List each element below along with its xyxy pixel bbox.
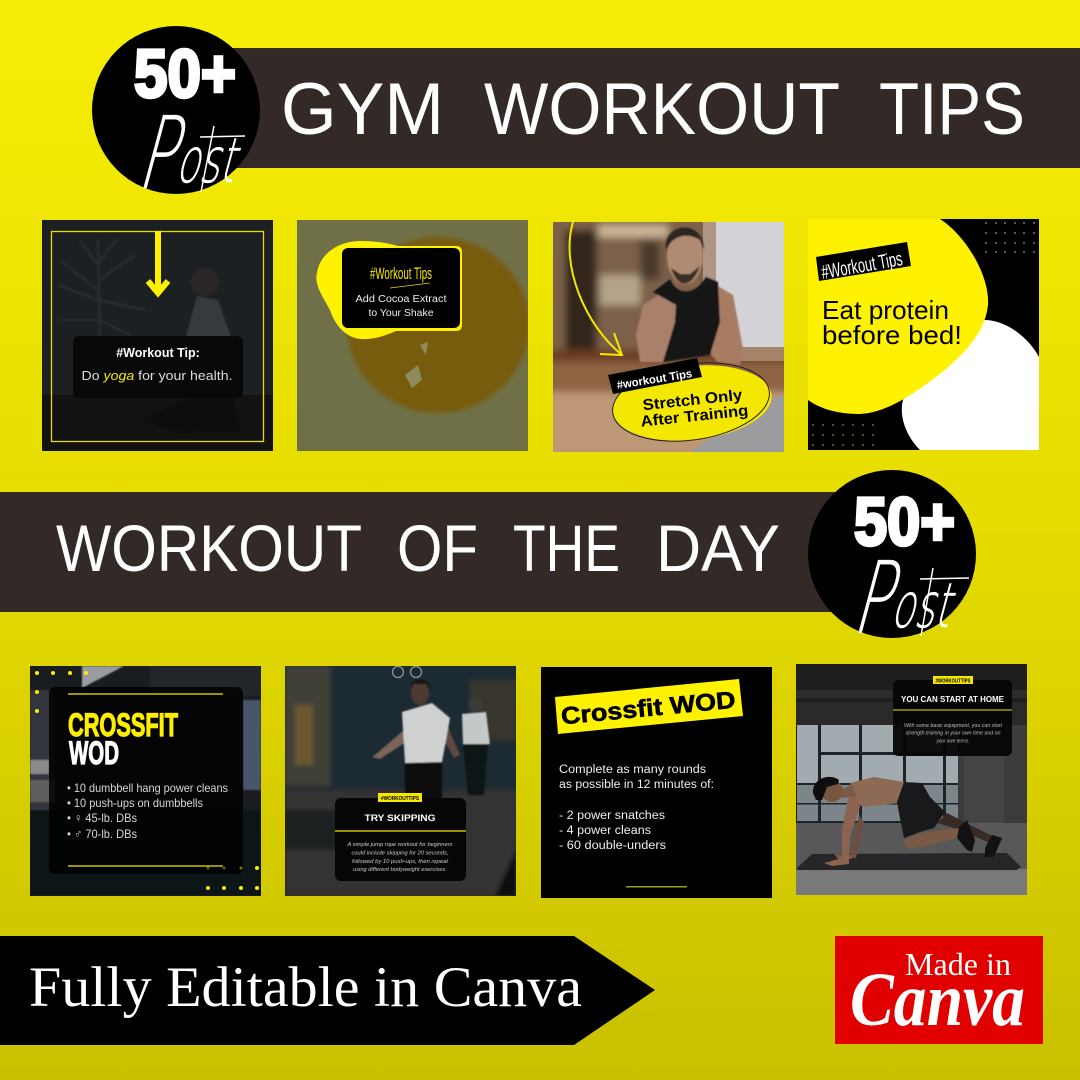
- callout: start at home: your own terms.: [936, 738, 970, 744]
- icon: down arrow: [148, 231, 168, 293]
- text: stretch tip: After Training: [640, 402, 749, 431]
- callout: start at home: strength training in your own time and on: [906, 730, 1001, 736]
- text: eat protein: [824, 300, 960, 344]
- badge: 50+ post middle: [808, 470, 976, 658]
- callout: cocoa tip: [342, 248, 460, 328]
- photo: seated woman silhouette: [142, 268, 240, 432]
- panel: you can start at home: [796, 664, 1027, 897]
- text: workout instructions: [559, 764, 714, 852]
- icon: curved arrow: [570, 222, 622, 355]
- photo: man in background: [462, 697, 490, 795]
- photo: industrial gym: [796, 664, 1027, 895]
- callout: try skipping: followed by 10 push-ups, then repeat: [352, 859, 448, 865]
- heading: crossfit wod: WOD: [69, 735, 119, 771]
- badge: 50+ post middle: 50+: [854, 484, 955, 560]
- text: workout instructions: - 4 power cleans: [559, 825, 651, 837]
- panel: crossfit wod list: [30, 666, 261, 896]
- callout: try skipping: A simple jump rope workout for beginners: [347, 842, 453, 848]
- photo: powder chunks: [405, 342, 428, 388]
- photo: man in plank: [813, 777, 1002, 866]
- photo: gym interior: [30, 666, 261, 896]
- photo: man: [636, 227, 743, 365]
- callout: cocoa tip: #Workout Tips: [370, 264, 432, 283]
- callout: yoga tip: #Workout Tip:: [116, 346, 200, 360]
- badge: 50+ post middle: ost: [886, 571, 964, 642]
- text: eat protein: Eat protein: [822, 295, 949, 325]
- photo: cocoa powder mound: [347, 237, 529, 413]
- label: workout tips tag: #workout Tips: [616, 368, 693, 392]
- dots: bottom left: [812, 424, 874, 446]
- dark card: [49, 687, 243, 874]
- list: exercises: • ♂ 70-lb. DBs: [67, 827, 137, 841]
- blob: yellow: [808, 219, 988, 414]
- banner: fully editable in canva: [0, 936, 655, 1045]
- list: exercises: • ♀ 45-lb. DBs: [67, 811, 137, 825]
- label: workout tips tag: [608, 358, 702, 394]
- text: eat protein: before bed!: [822, 320, 962, 350]
- badge: made in canva: Made in: [905, 946, 1011, 982]
- callout: try skipping: [335, 793, 466, 881]
- heading: workout of the day: DAY: [656, 511, 780, 585]
- panel: crossfit wod amrap: [541, 667, 772, 898]
- blob: yellow ellipse: [612, 365, 772, 441]
- badge: made in canva: Canva: [850, 958, 1025, 1042]
- callout: cocoa tip: to Your Shake: [368, 307, 434, 319]
- label: workout tips tag: #Workout Tips: [820, 248, 904, 284]
- badge: made in canva: [835, 936, 1043, 1044]
- photo: man skipping: [372, 679, 460, 800]
- photo: dark gym: [280, 660, 520, 900]
- heading: workout of the day: [56, 511, 780, 585]
- text: workout instructions: as possible in 12 minutes of:: [559, 779, 714, 791]
- text: stretch tip: [642, 390, 748, 427]
- heading: crossfit wod: [68, 712, 178, 765]
- heading: gym workout tips: [281, 69, 1025, 150]
- text: stretch tip: Stretch Only: [642, 387, 744, 414]
- panel: protein tip: [808, 219, 1039, 450]
- text: workout instructions: - 60 double-unders: [559, 840, 666, 852]
- blob: white: [902, 320, 1039, 450]
- heading: workout of the day: THE: [513, 511, 620, 585]
- callout: yoga tip: [73, 336, 243, 398]
- panel: try skipping: [280, 660, 520, 900]
- list: exercises: [67, 781, 228, 841]
- label: workout tips tag: #WORKOUTTIPS: [381, 796, 419, 802]
- heading: gym workout tips: WORKOUT: [484, 69, 840, 150]
- callout: try skipping: using different bodyweight exercises.: [353, 867, 447, 873]
- heading: gym workout tips: GYM: [281, 69, 444, 150]
- panel: cocoa extract tip: [297, 220, 529, 451]
- callout: try skipping: TRY SKIPPING: [364, 813, 436, 824]
- frame: [52, 232, 264, 442]
- heading: workout of the day: WORKOUT: [56, 511, 362, 585]
- panel: yoga tip: [42, 220, 273, 451]
- heading: gym workout tips: TIPS: [879, 69, 1025, 150]
- photo: gym background: [553, 222, 784, 452]
- badge: 50+ post middle: P: [844, 542, 913, 658]
- panel: stretch tip: [553, 222, 784, 452]
- badge: 50+ post top: ost: [171, 126, 249, 197]
- badge: 50+ post top: P: [129, 97, 198, 213]
- photo: rings: [392, 666, 422, 678]
- callout: start at home: With some basic equipment, you can start: [904, 723, 1003, 729]
- label: workout tips tag: #WORKOUTTIPS: [936, 678, 971, 684]
- photo: plant silhouette: [58, 238, 145, 345]
- label: crossfit wod tag: Crossfit WOD: [560, 687, 737, 730]
- photo: mat: [797, 853, 1021, 870]
- dots: top left: [35, 671, 88, 713]
- callout: yoga tip: Do yoga for your health.: [82, 368, 232, 383]
- badge: 50+ post top: 50+: [134, 36, 236, 112]
- callout: cocoa tip: Add Cocoa Extract: [356, 293, 447, 305]
- callout: start at home: YOU CAN START AT HOME: [901, 695, 1005, 704]
- dots: top right: [985, 222, 1035, 253]
- callout: try skipping: could include skipping for 20 seconds,: [352, 850, 448, 856]
- text: workout instructions: Complete as many rounds: [559, 764, 706, 776]
- callout: start at home: [893, 676, 1012, 756]
- heading: crossfit wod: CROSSFIT: [68, 707, 178, 743]
- banner: gym workout tips: [230, 48, 1080, 168]
- list: exercises: • 10 dumbbell hang power cleans: [67, 781, 228, 795]
- blob: yellow backdrop: [316, 241, 462, 339]
- label: crossfit wod tag: [555, 679, 743, 734]
- heading: workout of the day: OF: [397, 511, 478, 585]
- banner: workout of the day: [0, 492, 860, 612]
- list: exercises: • 10 push-ups on dumbbells: [67, 796, 203, 810]
- dots: bottom right: [206, 866, 259, 890]
- text: workout instructions: - 2 power snatches: [559, 810, 665, 822]
- banner: fully editable in canva: Fully Editable in Canva: [29, 956, 582, 1019]
- badge: 50+ post top: [92, 26, 260, 213]
- label: workout tips tag: [816, 242, 911, 284]
